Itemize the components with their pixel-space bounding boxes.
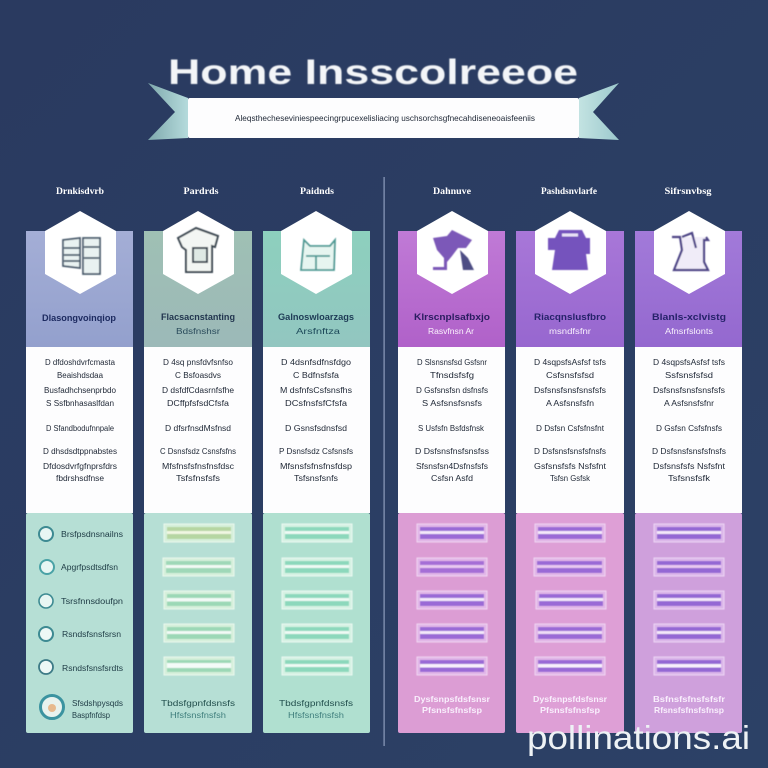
hexagon badge xyxy=(535,211,606,294)
heading: Arsfnftza xyxy=(296,327,341,336)
body text: Tsfsn Gsfsk xyxy=(550,474,591,483)
hexagon badge xyxy=(417,211,488,294)
body text: D Dsfsnsfsnsfsfnsfs xyxy=(534,447,606,456)
feature list with icons: Apgrfpsdtsdfsn xyxy=(61,563,118,572)
feature list with icons: Baspfnfdsp xyxy=(72,711,111,720)
column labels: Dahnuve xyxy=(433,187,471,197)
body text: D Slsnsnsfsd Gsfsnr xyxy=(417,358,487,367)
hexagon badge xyxy=(281,211,352,294)
icon: open book xyxy=(63,238,100,274)
hexagon badge xyxy=(163,211,234,294)
column labels: Pashdsnvlarfe xyxy=(541,187,597,197)
rating bars xyxy=(417,524,487,675)
panel: column 3 xyxy=(263,211,370,733)
heading xyxy=(278,312,354,336)
ribbon body xyxy=(188,98,579,138)
footer note: Pfsnsfsfnsfsp xyxy=(422,705,482,715)
heading: Flacsacnstanting xyxy=(161,312,235,323)
header band xyxy=(516,231,624,347)
body text: A Asfsnsfsfnr xyxy=(664,399,714,408)
footer note: Dysfsnpsfdsfsnsr xyxy=(533,694,608,704)
body text: D Gsfsn Csfsfnsfs xyxy=(656,424,722,433)
footer band xyxy=(398,513,505,733)
feature list with icons xyxy=(39,527,123,720)
body text: D Gsfsnsfsn dsfnsfs xyxy=(416,386,488,395)
body text: D dsfdfCdasrnfsfhe xyxy=(162,386,235,395)
body text xyxy=(43,358,117,483)
heading xyxy=(161,312,235,336)
footer note: Hfsfsnsfnsfsh xyxy=(288,711,344,720)
heading xyxy=(652,312,726,336)
heading: Riacqnslusfbro xyxy=(534,312,606,323)
body text: D dfsrfnsdMsfnsd xyxy=(165,424,231,433)
heading: Blanls-xclvistg xyxy=(652,312,726,323)
footer note: Hfsfsnsfnsfsh xyxy=(170,711,226,720)
body text: D 4sqpsfsAsfsf tsfs xyxy=(653,358,725,367)
body band xyxy=(635,347,742,513)
heading: Afnsrfslonts xyxy=(665,327,713,336)
footer note: Bsfnsfsfnsfsfsfr xyxy=(653,694,726,704)
footer note xyxy=(414,694,491,715)
body text: DCffpfsfsdCfsfa xyxy=(167,399,230,408)
body text: C Bsfoasdvs xyxy=(175,371,221,380)
body text xyxy=(415,358,489,483)
footer band xyxy=(26,513,133,733)
body band xyxy=(398,347,505,513)
panel: column 6 xyxy=(635,211,742,733)
body text: D Dsfsnsfsnsfsfnsfs xyxy=(652,447,726,456)
footer band xyxy=(635,513,742,733)
footer note: Tbdsfgpnfdsnsfs xyxy=(279,699,353,708)
footer note xyxy=(161,699,235,720)
title: Home Insscolreeoe xyxy=(168,53,578,92)
footer note: Dysfsnpsfdsfsnsr xyxy=(414,694,491,704)
heading: Klrscnplsafbxjo xyxy=(414,312,490,323)
body text xyxy=(652,358,726,483)
body text: Tsfsnsfsfk xyxy=(668,474,711,483)
body text xyxy=(160,358,236,483)
body text: fbdrshsdfnse xyxy=(56,474,105,483)
panel: column 1 xyxy=(26,211,133,733)
body text xyxy=(279,358,353,483)
footer note: Rfsnsfsfnsfsfnsp xyxy=(654,705,724,715)
body text: Mfsfnsfsfnsfnsfdsc xyxy=(162,462,234,471)
icon: dress form xyxy=(433,230,474,270)
column labels: Sifrsnvbsg xyxy=(664,187,712,197)
body text: Csfsnsfsfsd xyxy=(546,371,594,380)
body text: Tfnsdsfsfg xyxy=(430,371,474,380)
feature list with icons: Tsrsfnnsdoufpn xyxy=(61,597,123,606)
rating bars xyxy=(282,524,352,675)
icon: apron bag xyxy=(548,230,590,270)
body text: Busfadhchsenprbdo xyxy=(44,386,117,395)
column labels: Drnkisdvrb xyxy=(56,187,104,197)
column labels: Pardrds xyxy=(184,187,219,197)
body text: D 4sqpsfsAsfsf tsfs xyxy=(534,358,606,367)
footer band xyxy=(516,513,624,733)
body text: Csfsn Asfd xyxy=(431,474,473,483)
body text: Dsfsnsfsfs Nsfsfnt xyxy=(653,462,726,471)
header band xyxy=(398,231,505,347)
feature list with icons: Rsndsfsnsfsrsn xyxy=(62,630,121,639)
body text: D dhsdsdtppnabstes xyxy=(43,447,117,456)
rating bars xyxy=(654,524,724,675)
body text: D Dsfsn Csfsfnsfnt xyxy=(536,424,605,433)
icon: work apron xyxy=(672,233,708,270)
body text: S Ssfbnhasaslfdan xyxy=(46,399,114,408)
feature list with icons: Sfsdshpysqds xyxy=(72,699,123,708)
rating bars xyxy=(534,524,606,675)
center divider xyxy=(384,177,385,746)
body band xyxy=(144,347,252,513)
header band xyxy=(144,231,252,347)
body text: DCsfnsfsfCfsfa xyxy=(285,399,348,408)
body band xyxy=(516,347,624,513)
heading: Dlasongvoinqiop xyxy=(42,313,116,324)
body text: Ssfsnsfsfsd xyxy=(665,371,713,380)
watermark: pollinations.ai xyxy=(527,719,750,756)
body text: Dsfsnsfsnsfsnsfsfs xyxy=(534,386,606,395)
body text: D Dsfsnsfnsfsnsfss xyxy=(415,447,489,456)
header band xyxy=(263,231,370,347)
body text: D dfdoshdvrfcmasta xyxy=(45,358,116,367)
body text: M dsfnfsCsfsnsfhs xyxy=(280,386,352,395)
ribbon banner with subtitle xyxy=(148,83,619,140)
footer note xyxy=(653,694,726,715)
body text: Beaishdsdaa xyxy=(57,371,104,380)
body text: A Asfsnsfsfn xyxy=(546,399,594,408)
body text: Mfsnsfsfnsfnsfdsp xyxy=(280,462,353,471)
icon: house apron xyxy=(178,228,218,272)
footer note: Tbdsfgpnfdsnsfs xyxy=(161,699,235,708)
body text: P Dsnsfsdz Csfsnsfs xyxy=(279,447,353,456)
footer note xyxy=(533,694,608,715)
heading xyxy=(414,312,490,336)
body text: D 4dsnfsdfnsfdgo xyxy=(281,358,352,367)
body text: Dsfsnsfsnsfsnsfsfs xyxy=(653,386,725,395)
body text: S Asfsnsfsnsfs xyxy=(422,399,482,408)
panel: column 5 xyxy=(516,211,624,733)
subtitle: Aleqsthecheseviniespeecingrpucexelisliacing uschsorchsgfnecahdiseneoaisfeeniis xyxy=(235,113,535,123)
body text: Sfsnsfsn4Dsfnsfsfs xyxy=(416,462,488,471)
column labels: Paidnds xyxy=(300,187,334,197)
heading: Galnoswloarzags xyxy=(278,312,354,323)
body band xyxy=(263,347,370,513)
body text: Gsfsnsfsfs Nsfsfnt xyxy=(534,462,607,471)
header band xyxy=(26,231,133,347)
body text: D Sfandbodufnnpale xyxy=(46,424,115,433)
feature list with icons: Rsndsfsnsfsrdts xyxy=(62,664,123,673)
body text: Tsfsnsfsnfs xyxy=(294,474,338,483)
body text: D 4sq pnsfdvfsnfso xyxy=(163,358,234,367)
body band xyxy=(26,347,133,513)
heading: Bdsfnshsr xyxy=(176,327,220,336)
footer band xyxy=(263,513,370,733)
heading xyxy=(534,312,606,336)
footer note: Pfsnsfsfnsfsp xyxy=(540,705,600,715)
panel: column 4 xyxy=(398,211,505,733)
header band xyxy=(635,231,742,347)
feature list with icons: Brsfpsdnsnailns xyxy=(61,530,123,539)
panel: column 2 xyxy=(144,211,252,733)
body text: S Usfsfn Bsfdsfnsk xyxy=(418,424,485,433)
hexagon badge xyxy=(654,211,725,294)
ribbon right tail xyxy=(579,83,619,140)
heading: Rasvfnsn Ar xyxy=(428,327,474,336)
ribbon left tail xyxy=(148,83,188,140)
heading: msndfsfnr xyxy=(549,327,591,336)
body text xyxy=(534,358,607,483)
icon: storage unit xyxy=(301,240,335,270)
footer note xyxy=(279,699,353,720)
body text: Dfdosdvrfgfnprsfdrs xyxy=(43,462,117,471)
footer band xyxy=(144,513,252,733)
hexagon badge xyxy=(45,211,116,294)
body text: C Dsnsfsdz Csnsfsfns xyxy=(160,447,236,456)
body text: D Gsnsfsdnsfsd xyxy=(285,424,347,433)
rating bars xyxy=(163,524,234,675)
column labels xyxy=(56,187,712,197)
body text: C Bdfnsfsfa xyxy=(293,371,340,380)
body text: Tsfsfnsfsfs xyxy=(176,474,220,483)
